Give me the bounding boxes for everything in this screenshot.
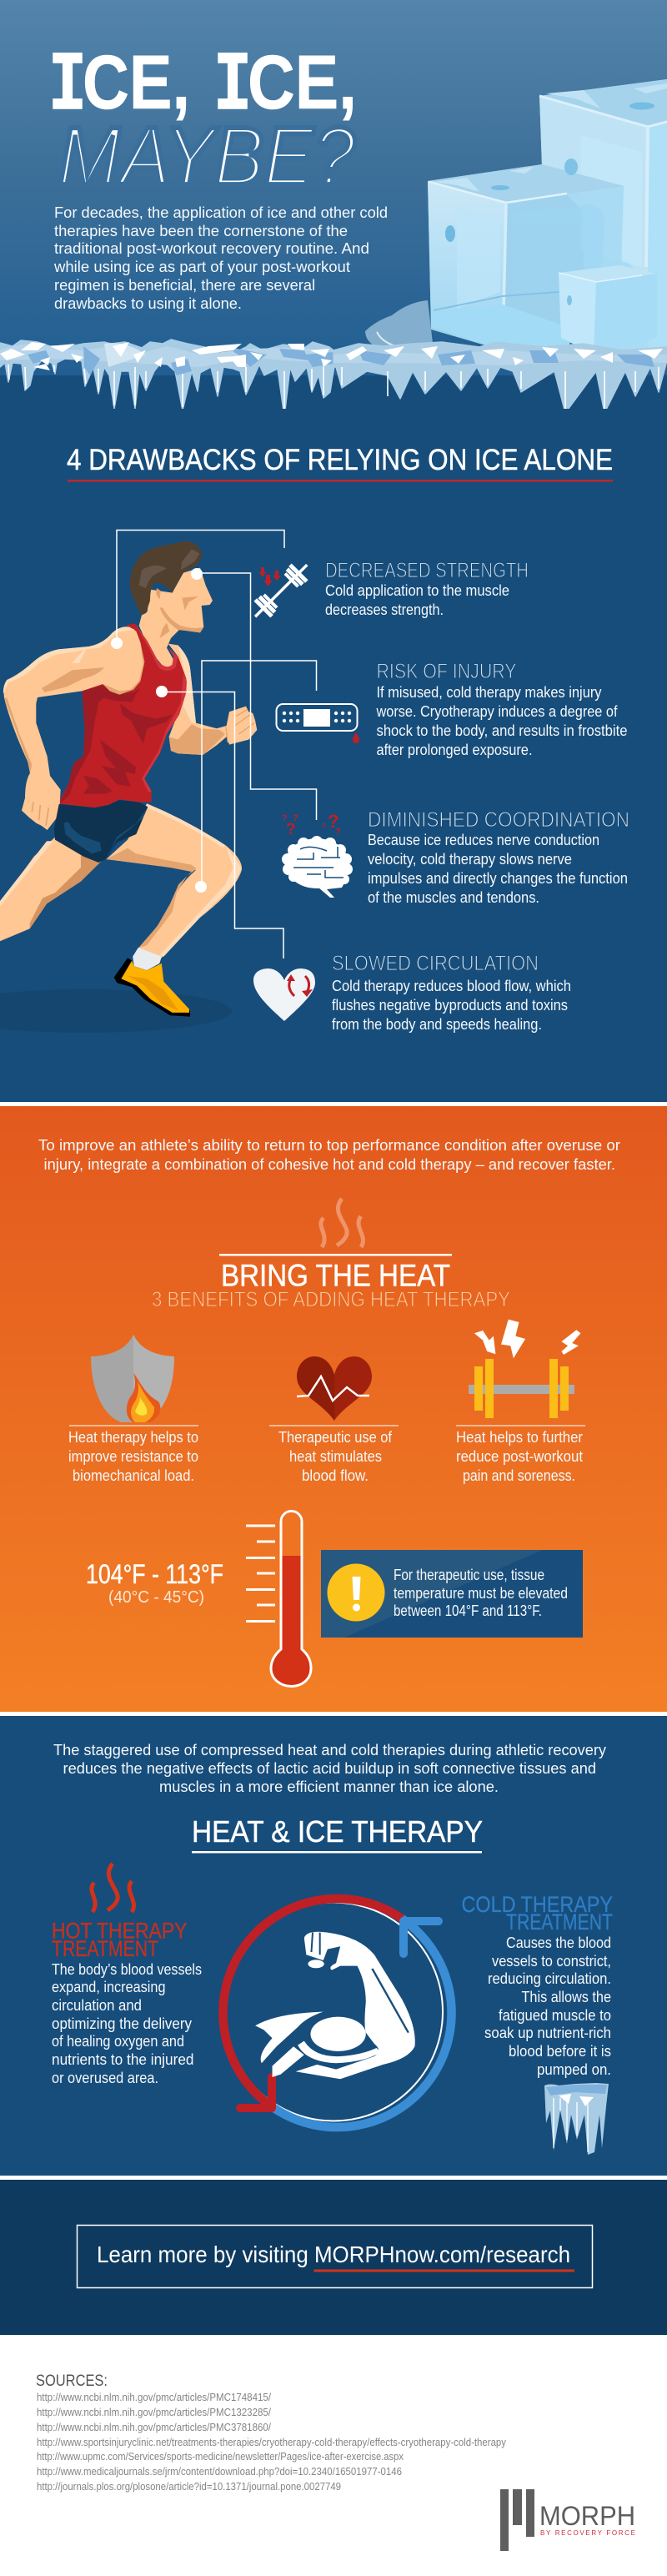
drawback: diminished coordination: Because ice reduces nerve conduction <box>368 832 599 848</box>
callout: therapeutic temperature: For therapeutic use, tissue <box>394 1567 544 1583</box>
icon: heart with pulse <box>297 1356 372 1421</box>
drawback: decreased strength: Cold application to the muscle <box>325 582 509 599</box>
cold therapy column: Causes the blood <box>506 1935 611 1951</box>
sources list: http://journals.plos.org/plosone/article?id=10.1371/journal.pone.0027749 <box>37 2480 341 2493</box>
runner shadow <box>0 989 232 1033</box>
hot therapy column: expand, increasing <box>52 1979 165 1995</box>
hot therapy column: or overused area. <box>52 2070 158 2086</box>
benefit: blood flow: Therapeutic use of <box>278 1429 393 1446</box>
benefit: resistance: Heat therapy helps to <box>68 1429 198 1446</box>
sock <box>133 948 162 970</box>
icon: dumbbell with bolts <box>469 1320 580 1418</box>
heading rule <box>219 1254 452 1256</box>
cta underline <box>313 2269 574 2272</box>
icon: brain: ? <box>293 813 298 823</box>
icon: steam <box>321 1199 363 1247</box>
drawback: risk of injury <box>376 660 627 758</box>
sources list: http://www.ncbi.nlm.nih.gov/pmc/articles/PMC1323285/ <box>37 2406 271 2418</box>
benefit: blood flow: blood flow. <box>302 1467 369 1484</box>
title: ice, ice: CE, <box>83 40 190 125</box>
drawback: risk of injury: after prolonged exposure. <box>377 742 532 758</box>
icon: bandage <box>277 704 359 743</box>
divider <box>0 1712 667 1716</box>
drawback: diminished coordination: DIMINISHED COORDINATION <box>368 808 629 832</box>
panel: call to action <box>0 2180 667 2335</box>
intro text: traditional post-workout recovery routine. And <box>54 240 369 257</box>
drawback: diminished coordination: velocity, cold therapy slows nerve <box>368 851 572 868</box>
cold therapy column <box>462 1892 613 2078</box>
title: ice, ice: I <box>48 40 87 134</box>
intro text: muscles in a more efficient manner than ice alone. <box>159 1779 499 1795</box>
sources list <box>37 2391 506 2493</box>
benefit: resistance: improve resistance to <box>68 1448 198 1465</box>
benefit: blood flow <box>269 1425 399 1484</box>
intro text: drawbacks to using it alone. <box>54 295 242 312</box>
temperature readout <box>86 1559 223 1607</box>
sources list: http://www.ncbi.nlm.nih.gov/pmc/articles/PMC1748415/ <box>37 2391 271 2403</box>
hot therapy column: circulation and <box>52 1997 142 2014</box>
intro text: To improve an athlete’s ability to return to top performance condition after overuse or <box>38 1137 620 1154</box>
heading: heat and ice therapy: HEAT & ICE THERAPY <box>192 1814 483 1849</box>
benefit: blood flow: heat stimulates <box>289 1448 382 1465</box>
sources list: http://www.upmc.com/Services/sports-medicine/newsletter/Pages/ice-after-exercise.aspx <box>37 2450 404 2463</box>
hot therapy column: HOT THERAPY <box>52 1919 187 1944</box>
shorts <box>54 800 148 863</box>
hot therapy column: of healing oxygen and <box>52 2033 184 2050</box>
benefit: resistance <box>68 1425 198 1484</box>
hot therapy column: optimizing the delivery <box>52 2015 192 2032</box>
benefit: soreness: reduce post-workout <box>456 1448 583 1465</box>
temperature readout: 104°F - 113°F <box>86 1559 223 1589</box>
intro text <box>38 1137 620 1173</box>
icon: brain: ? <box>286 821 296 838</box>
drawback: slowed circulation: flushes negative byproducts and toxins <box>332 997 568 1014</box>
shoe <box>114 958 190 1017</box>
hot therapy column: The body’s blood vessels <box>52 1961 202 1978</box>
cold therapy column: This allows the <box>522 1989 611 2005</box>
cta text: Learn more by visiting MORPHnow.com/research <box>97 2241 570 2267</box>
illustration: runner legs <box>0 803 242 1017</box>
intro text: The staggered use of compressed heat and cold therapies during athletic recovery <box>53 1742 606 1758</box>
drawback: slowed circulation: from the body and speeds healing. <box>332 1016 542 1033</box>
cta box <box>77 2226 592 2287</box>
icon: brain: ? <box>282 813 288 823</box>
sources list: http://www.sportsinjuryclinic.net/treatments-therapies/cryotherapy-cold-therapy/effects-cryotherapy-cold-therapy <box>37 2436 506 2448</box>
drawback: diminished coordination: impulses and directly changes the function <box>368 870 628 887</box>
intro text: For decades, the application of ice and other cold <box>54 204 388 221</box>
illustration: snow and icicles <box>0 340 667 417</box>
illustration: runner upper body <box>3 541 257 863</box>
drawback: risk of injury: worse. Cryotherapy induces a degree of <box>376 703 618 720</box>
cold therapy column: reducing circulation. <box>488 1970 611 1987</box>
logo: morph <box>500 2489 635 2551</box>
heading: bring the heat: BRING THE HEAT <box>221 1258 450 1293</box>
panel: sources <box>0 2335 667 2576</box>
sources list: http://www.medicaljournals.se/jrm/content/download.php?doi=10.2340/16501977-0146 <box>37 2465 402 2478</box>
callout: therapeutic temperature: between 104°F and 113°F. <box>394 1602 542 1619</box>
hot therapy column: nutrients to the injured <box>52 2051 193 2068</box>
panel: bring the heat <box>0 1106 667 1712</box>
illustration: ice cubes <box>365 79 667 355</box>
intro text: therapies have been the cornerstone of the <box>54 223 348 239</box>
divider <box>0 2176 667 2180</box>
drawback: decreased strength: DECREASED STRENGTH <box>325 559 529 582</box>
heading rule <box>192 1851 482 1854</box>
benefit: soreness <box>456 1425 585 1484</box>
icon: shield with flame <box>91 1335 174 1422</box>
back arm <box>3 626 144 830</box>
icon: brain: ? <box>335 827 341 837</box>
intro text: reduces the negative effects of lactic acid buildup in soft connective tissues and <box>63 1760 596 1777</box>
icon: icicle <box>544 2083 609 2155</box>
sources list: http://www.ncbi.nlm.nih.gov/pmc/articles/PMC3781860/ <box>37 2421 271 2433</box>
cycle ring <box>223 1899 452 2127</box>
title: maybe: MAYBE? <box>58 110 355 202</box>
front leg <box>107 803 242 958</box>
divider <box>0 1102 667 1106</box>
tank top <box>58 623 187 808</box>
cold therapy column: soak up nutrient-rich <box>484 2025 611 2041</box>
drawback: decreased strength: decreases strength. <box>325 601 444 618</box>
callout: therapeutic temperature <box>321 1550 583 1638</box>
benefit: soreness: pain and soreness. <box>463 1467 575 1484</box>
icon: dumbbell <box>247 556 315 625</box>
sources heading: SOURCES: <box>36 2372 108 2390</box>
callout: therapeutic temperature: temperature must be elevated <box>394 1585 568 1602</box>
drawback: slowed circulation: Cold therapy reduces blood flow, which <box>332 978 571 994</box>
cold therapy column: vessels to constrict, <box>492 1953 611 1970</box>
thermometer <box>246 1512 311 1687</box>
heading underline <box>68 480 613 482</box>
drawback: slowed circulation <box>332 952 571 1033</box>
intro text <box>53 204 388 312</box>
back leg <box>0 837 102 941</box>
intro text <box>53 1742 606 1795</box>
icon: brain <box>282 811 353 898</box>
panel: drawbacks <box>0 409 667 1102</box>
heading: 4 drawbacks: 4 DRAWBACKS OF RELYING ON ICE ALONE <box>67 444 613 476</box>
drawback: risk of injury: RISK OF INJURY <box>377 660 517 683</box>
drawback: risk of injury: If misused, cold therapy makes injury <box>377 684 602 701</box>
panel: heat and ice therapy <box>0 1716 667 2176</box>
drawback: diminished coordination <box>368 808 629 906</box>
connector lines <box>117 531 317 958</box>
cold therapy column: COLD THERAPY <box>462 1892 613 1917</box>
hot therapy column: TREATMENT <box>52 1936 158 1961</box>
drawback: diminished coordination: of the muscles and tendons. <box>368 889 539 906</box>
icon: brain: ? <box>322 823 326 830</box>
cold therapy column: pumped on. <box>537 2061 611 2078</box>
benefit: soreness: Heat helps to further <box>456 1429 583 1446</box>
drawback: slowed circulation: SLOWED CIRCULATION <box>332 952 539 975</box>
drawback: decreased strength <box>325 559 529 618</box>
title: ice, ice: CE, <box>248 40 357 125</box>
icon: heart with circulation arrows <box>253 969 315 1021</box>
icon: flexed arm <box>255 1932 415 2079</box>
subheading: 3 benefits: 3 BENEFITS OF ADDING HEAT THERAPY <box>152 1288 510 1311</box>
logo: morph: BY RECOVERY FORCE <box>540 2529 635 2537</box>
panel: header <box>0 0 667 417</box>
front arm <box>168 644 257 755</box>
cold therapy column: blood before it is <box>509 2043 611 2060</box>
hair <box>130 541 202 615</box>
cold therapy column: TREATMENT <box>506 1909 613 1935</box>
hot therapy column <box>52 1864 202 2086</box>
title: ice, ice: I <box>213 40 252 134</box>
connector dots <box>111 568 207 893</box>
intro text: regimen is beneficial, there are several <box>54 277 315 294</box>
benefit: resistance: biomechanical load. <box>73 1467 194 1484</box>
icon: red steam <box>92 1864 133 1912</box>
logo: morph: MORPH <box>539 2501 635 2531</box>
intro text: while using ice as part of your post-workout <box>53 259 350 275</box>
title: ice, ice <box>48 40 357 134</box>
cold therapy column: fatigued muscle to <box>499 2007 611 2024</box>
temperature readout: (40°C - 45°C) <box>108 1588 204 1607</box>
neck and face <box>139 568 213 667</box>
icon: brain: ? <box>328 811 339 832</box>
drawback: risk of injury: shock to the body, and results in frostbite <box>377 722 627 739</box>
intro text: injury, integrate a combination of cohesive hot and cold therapy – and recover faster. <box>43 1156 615 1173</box>
